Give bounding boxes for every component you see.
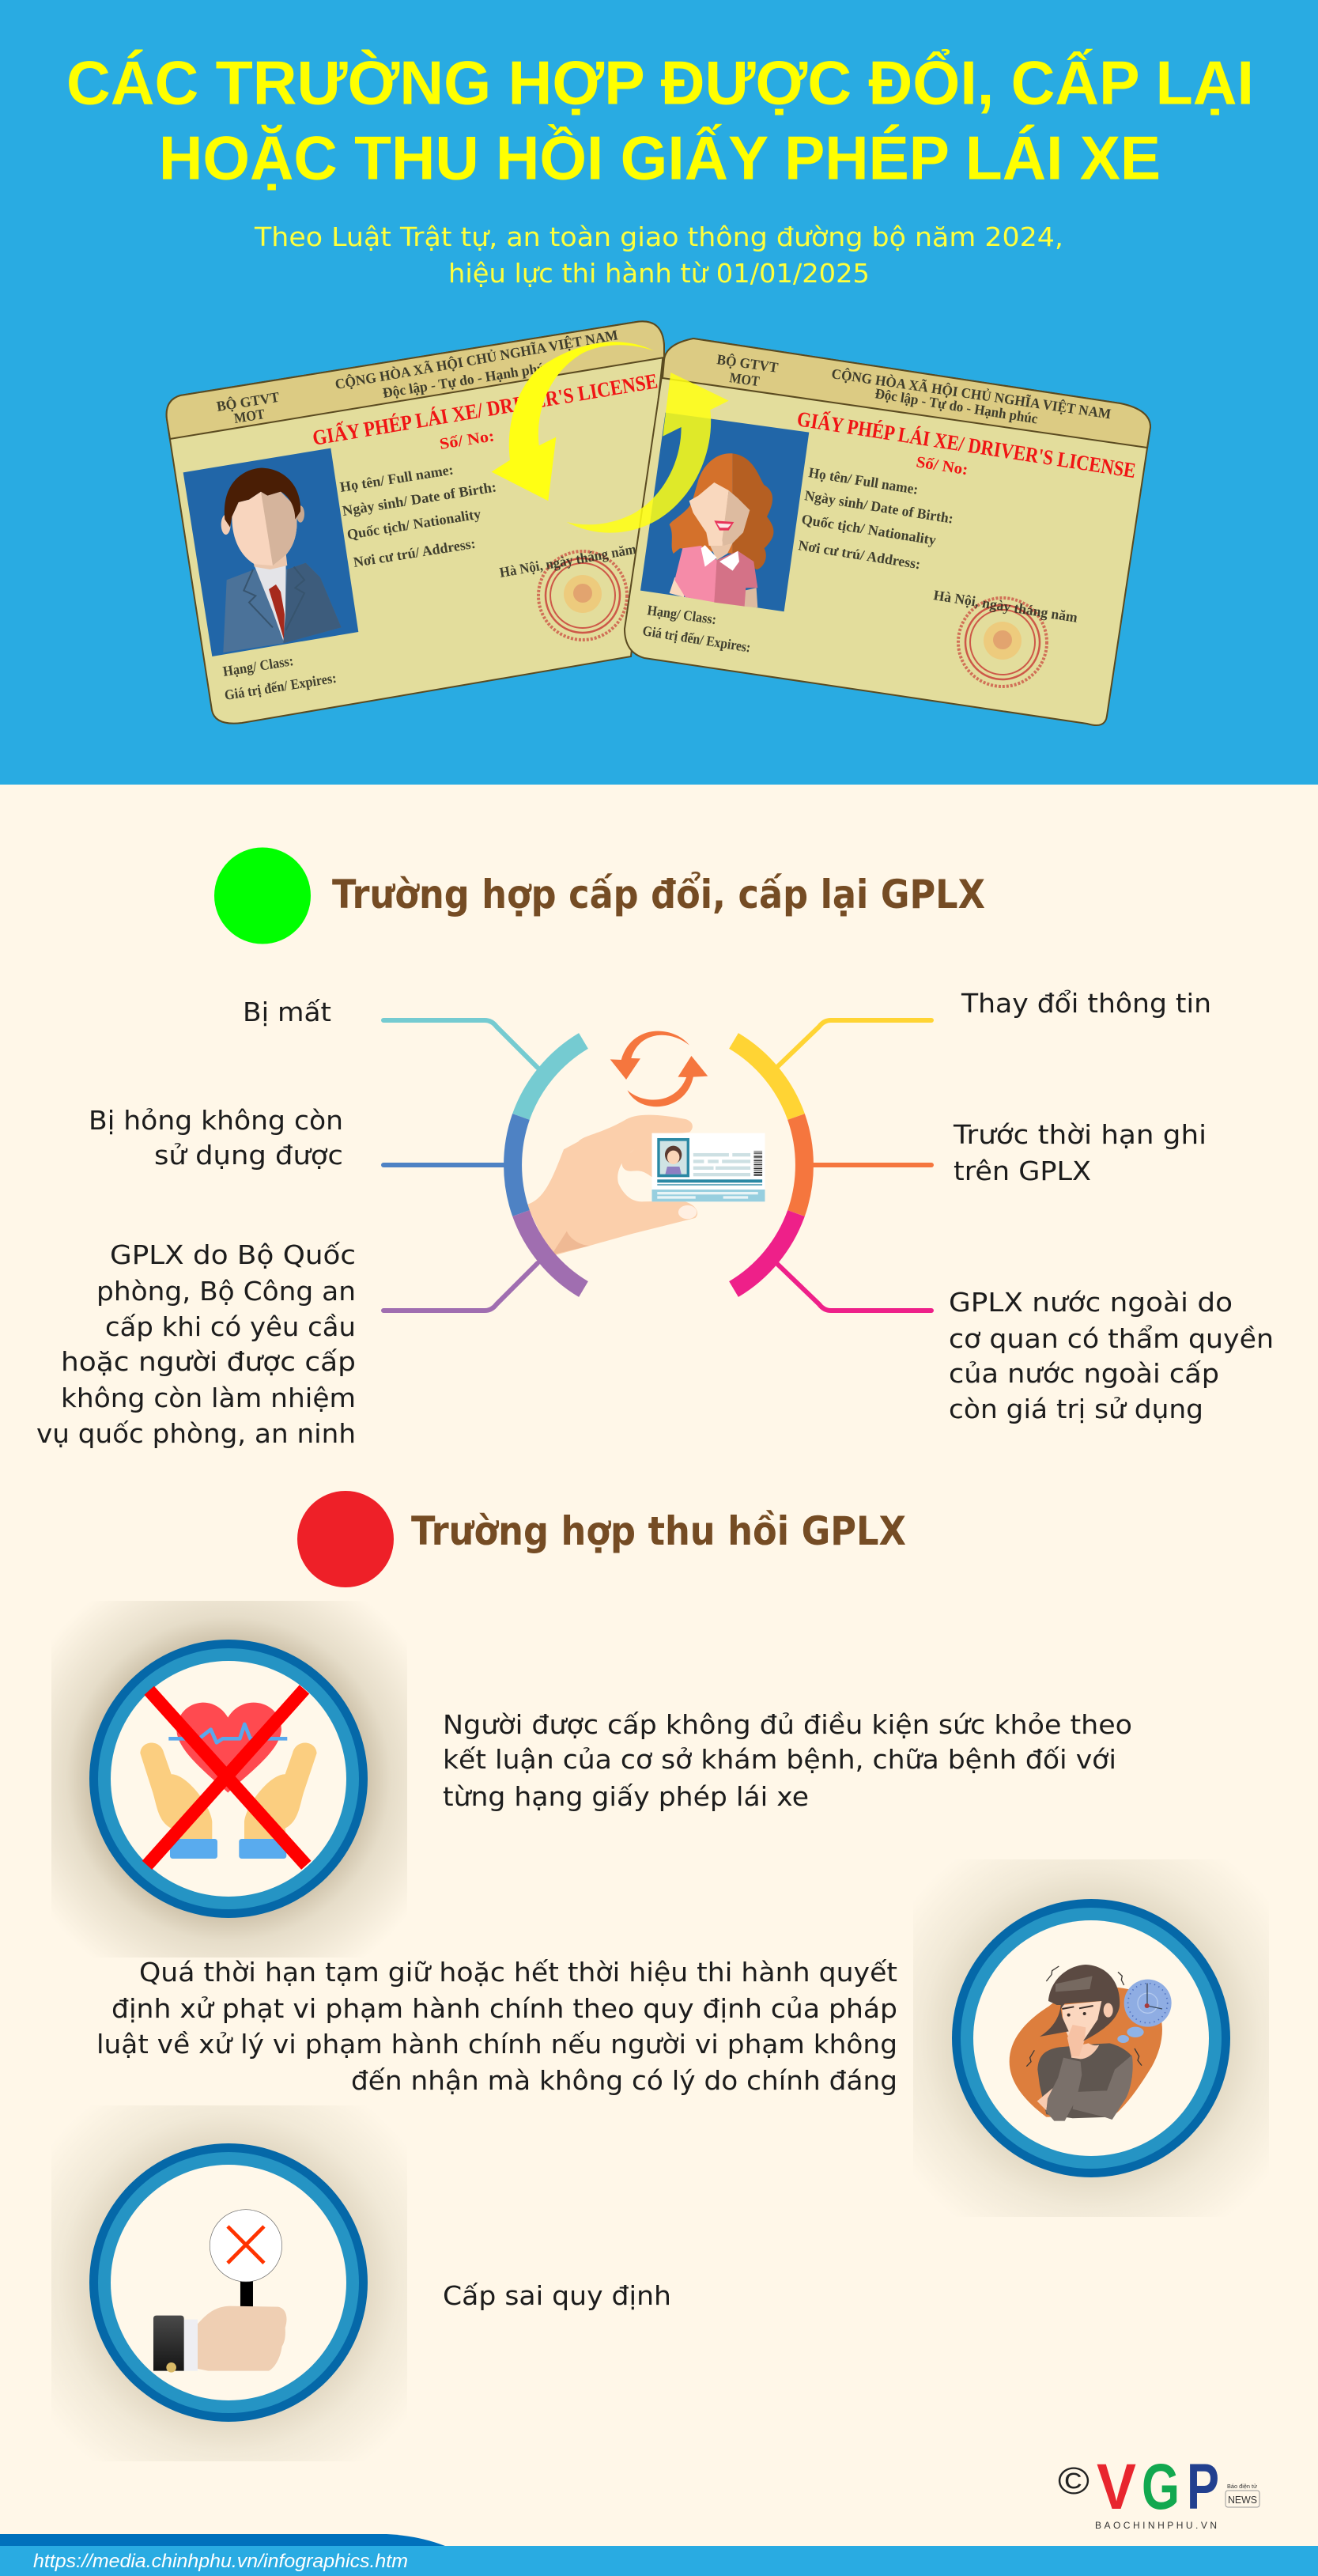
title: HOẶC THU HỒI GIẤY PHÉP LÁI XE: [159, 123, 1161, 193]
text block: health: [443, 1709, 1132, 1812]
left license card: [167, 321, 664, 724]
text block: left reasons: phòng, Bộ Công an: [96, 1276, 356, 1307]
text block: left reasons: Bị hỏng không còn: [89, 1105, 343, 1136]
left license card: Số/ No:: [438, 427, 496, 453]
left license card: MOT: [232, 406, 266, 426]
subtitle: Theo Luật Trật tự, an toàn giao thông đường bộ năm 2024,: [254, 221, 1063, 252]
icon: orange refresh arrows: [610, 1031, 708, 1106]
blue segment: [383, 1117, 521, 1213]
left license card: Nơi cư trú/ Address:: [352, 535, 477, 570]
text block: left reasons: GPLX do Bộ Quốc: [110, 1239, 356, 1270]
footer bar: https://media.chinhphu.vn/infographics.htm: [33, 2551, 408, 2572]
left license card: Giá trị đến/ Expires:: [223, 670, 338, 703]
right license card: Số/ No:: [915, 453, 969, 479]
text block: overdue: đến nhận mà không có lý do chính đáng: [351, 2065, 897, 2096]
logo: VGP: V: [1097, 2451, 1136, 2523]
left license card: Ngày sinh/ Date of Birth:: [341, 479, 497, 519]
text block: left reasons: [36, 997, 356, 1449]
icon: wrongly issued badge: [51, 2105, 407, 2461]
hand holding license: [527, 1115, 765, 1256]
title: CÁC TRƯỜNG HỢP ĐƯỢC ĐỔI, CẤP LẠI: [66, 47, 1254, 117]
text block: right reasons: Trước thời hạn ghi: [953, 1119, 1207, 1150]
subtitle: [254, 221, 1063, 289]
text block: right reasons: cơ quan có thẩm quyền: [949, 1323, 1274, 1354]
pink segment: [734, 1213, 931, 1311]
logo: VGP: Báo điện tử: [1227, 2483, 1257, 2490]
left license card: Hạng/ Class:: [221, 653, 295, 679]
orange segment: [796, 1117, 931, 1213]
subtitle: hiệu lực thi hành từ 01/01/2025: [448, 258, 870, 289]
left license card: Hà Nội, ngày tháng năm: [498, 541, 637, 581]
text block: health: kết luận của cơ sở khám bệnh, chữa bệnh đối với: [443, 1744, 1116, 1775]
text block: right reasons: GPLX nước ngoài do: [949, 1287, 1233, 1318]
left license card: GIẤY PHÉP LÁI XE/ DRIVER'S LICENSE: [311, 368, 659, 450]
teal segment: [383, 1020, 583, 1117]
heading: cấp đổi, cấp lại: [214, 848, 985, 944]
text block: overdue: luật về xử lý vi phạm hành chính nếu người vi phạm không: [96, 2029, 897, 2060]
left license card: CỘNG HÒA XÃ HỘI CHỦ NGHĨA VIỆT NAM: [334, 326, 619, 392]
yellow segment: [734, 1020, 931, 1117]
left license card: Độc lập - Tự do - Hạnh phúc: [381, 359, 552, 401]
heading: thu hồi: Trường hợp thu hồi GPLX: [411, 1508, 906, 1554]
logo: VGP: P: [1187, 2451, 1219, 2523]
text block: left reasons: vụ quốc phòng, an ninh: [36, 1418, 356, 1449]
right license card: BỘ GTVT: [716, 350, 780, 376]
logo: VGP: BAOCHINHPHU.VN: [1095, 2520, 1217, 2531]
right license card: GIẤY PHÉP LÁI XE/ DRIVER'S LICENSE: [795, 406, 1138, 482]
left license card: Họ tên/ Full name:: [338, 462, 455, 495]
diagram: ring with connector lines: [383, 1020, 931, 1311]
purple segment: [383, 1213, 583, 1311]
logo: VGP: G: [1142, 2451, 1180, 2523]
text block: left reasons: không còn làm nhiệm: [61, 1383, 356, 1413]
right license card: MOT: [728, 369, 761, 389]
text block: wrongly issued: Cấp sai quy định: [443, 2280, 671, 2311]
right license card: Độc lập - Tự do - Hạnh phúc: [874, 385, 1039, 426]
footer bar: [0, 2534, 1318, 2576]
text block: health: từng hạng giấy phép lái xe: [443, 1781, 809, 1812]
right license card: Ngày sinh/ Date of Birth:: [803, 487, 954, 527]
seal: [538, 551, 627, 640]
right license card: Giá trị đến/ Expires:: [641, 622, 752, 656]
text block: left reasons: hoặc người được cấp: [61, 1346, 356, 1377]
text block: left reasons: Bị mất: [243, 997, 331, 1027]
title: [66, 47, 1254, 193]
illustration: two driver's licenses: [167, 321, 1150, 725]
text block: overdue: [96, 1957, 897, 2096]
panel: blue header: [0, 0, 1318, 785]
text block: overdue: Quá thời hạn tạm giữ hoặc hết thời hiệu thi hành quyết: [139, 1957, 897, 1988]
left license card: BỘ GTVT: [215, 388, 281, 414]
logo: VGP: NEWS: [1228, 2494, 1257, 2506]
right license card: Hạng/ Class:: [646, 602, 717, 627]
heading: thu hồi: [297, 1491, 906, 1587]
text block: right reasons: của nước ngoài cấp: [949, 1358, 1219, 1389]
right license card: Nơi cư trú/ Address:: [797, 537, 922, 572]
left license card: Quốc tịch/ Nationality: [346, 505, 482, 543]
text block: left reasons: sử dụng được: [154, 1140, 343, 1171]
text block: health: Người được cấp không đủ điều kiện sức khỏe theo: [443, 1709, 1132, 1740]
icon: yellow swap arrows: [492, 342, 729, 533]
text block: overdue: định xử phạt vi phạm hành chính theo quy định của pháp: [111, 1993, 897, 2024]
right license card: Quốc tịch/ Nationality: [800, 511, 937, 548]
logo: VGP: [1058, 2451, 1259, 2531]
text block: left reasons: cấp khi có yêu cầu: [105, 1311, 356, 1342]
text block: right reasons: trên GPLX: [954, 1156, 1091, 1186]
heading: cấp đổi, cấp lại: Trường hợp cấp đổi, cấp lại GPLX: [332, 872, 985, 917]
right license card: Hà Nội, ngày tháng năm: [932, 587, 1078, 626]
text block: right reasons: [949, 988, 1274, 1424]
icon: worried person badge: [913, 1859, 1269, 2217]
seal: [958, 598, 1047, 687]
text block: right reasons: Thay đổi thông tin: [961, 988, 1211, 1019]
icon: health badge: [51, 1601, 407, 1958]
text block: right reasons: còn giá trị sử dụng: [949, 1394, 1203, 1424]
logo: VGP: ©: [1058, 2461, 1090, 2502]
right license card: CỘNG HÒA XÃ HỘI CHỦ NGHĨA VIỆT NAM: [830, 365, 1112, 422]
right license card: Họ tên/ Full name:: [807, 464, 920, 497]
right license card: [625, 339, 1150, 725]
